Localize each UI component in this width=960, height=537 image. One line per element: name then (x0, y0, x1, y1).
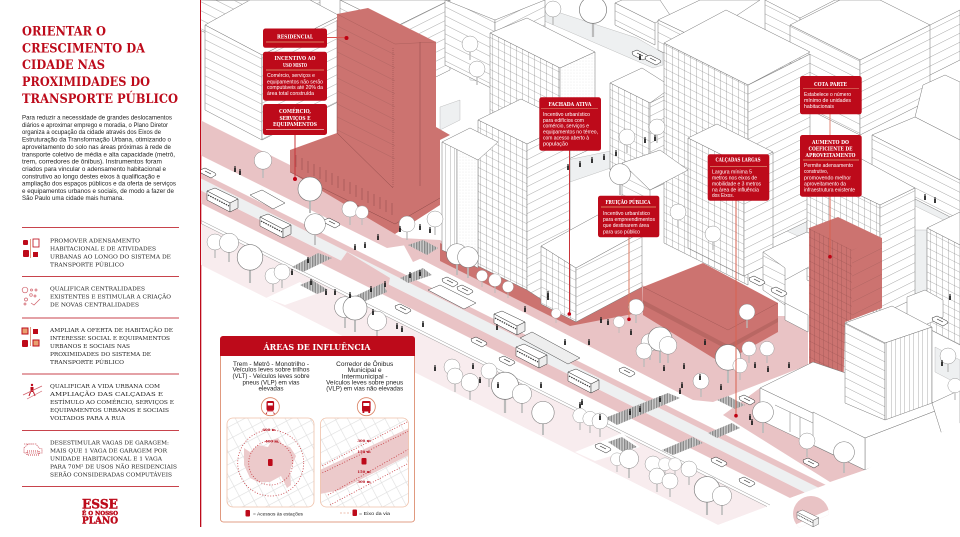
callout: aumento do coeficiente de aproveitamento: promovendo melhor (804, 175, 851, 181)
legend: stations (246, 510, 304, 516)
column text: bus: Municipal e (348, 367, 382, 374)
callout: fruição pública: para uso público (603, 229, 640, 235)
intro text: São Paulo uma cidade mais humana. (22, 195, 124, 202)
callout: fachada ativa: FACHADA ATIVA (548, 102, 592, 108)
objective 5 (24, 441, 177, 479)
objective 5: SERÃO CONSIDERADAS COMPUTÁVEIS (50, 471, 172, 479)
objective 3: TRANSPORTE PÚBLICO (50, 358, 124, 366)
front right building and podium (760, 306, 960, 470)
callout: fachada ativa: Incentivo urbanístico (543, 112, 590, 118)
intro text (22, 114, 176, 202)
objective 3: PROXIMIDADES DO SISTEMA DE (50, 352, 151, 358)
callout: incentivo ao uso misto: INCENTIVO AO (274, 56, 316, 62)
column text: bus: Veículos leves sobre pneus (326, 379, 403, 386)
column text: rail: pneus (VLP) em vias (242, 379, 300, 386)
callout: incentivo ao uso misto: USO MISTO (283, 63, 307, 69)
objective 1: URBANAS AO LONGO DO SISTEMA DE (50, 255, 171, 261)
title (22, 25, 178, 107)
intro text: criados para vincular o adensamento habitacional e (22, 166, 166, 173)
objective 4: ESTÍMULO AO COMÉRCIO, SERVIÇOS E (50, 398, 174, 406)
callout: cota parte: habitacionais (804, 104, 834, 110)
intro text: Para reduzir a necessidade de grandes deslocamentos (22, 114, 172, 122)
trees (207, 0, 960, 515)
objective 4: QUALIFICAR A VIDA URBANA COM (50, 384, 160, 390)
callout: incentivo ao uso misto (263, 52, 327, 101)
callout: incentivo ao uso misto: computáveis até 20% da (267, 85, 324, 91)
objective 1 (23, 239, 171, 269)
title: TRANSPORTE PÚBLICO (22, 90, 178, 107)
callout: aumento do coeficiente de aproveitamento: AUMENTO DO (811, 140, 849, 146)
title: CIDADE NAS (22, 58, 105, 73)
callout: aumento do coeficiente de aproveitamento: aproveitamento da (804, 181, 847, 187)
vehicles (200, 50, 948, 487)
callout: cota parte: Estabelece o número (804, 92, 851, 98)
icon: bus (357, 398, 375, 416)
callout: aumento do coeficiente de aproveitamento (800, 135, 862, 197)
callout: comércio, serviços e equipamentos: COMÉRCIO, (279, 107, 311, 115)
column text: rail (232, 361, 310, 392)
column text: rail: Veículos leves sobre trilhos (232, 366, 310, 374)
intro text: construtivo ao longo destes eixos à qualificação e (22, 173, 160, 180)
map: bus corridor influence: 150 m (357, 449, 371, 454)
callout: calçadas largas (708, 154, 769, 201)
callout: fachada ativa: equipamentos no térreo, (543, 130, 598, 136)
lens detail: bus (793, 496, 829, 528)
objective 1: TRANSPORTE PÚBLICO (50, 261, 124, 269)
callout: calçadas largas: Largura mínima 5 (712, 170, 752, 176)
intro text: diários e aproximar emprego e moradia, o Plano Diretor (22, 122, 168, 129)
objective 4: AMPLIAÇÃO DAS CALÇADAS E (49, 390, 163, 398)
callout: cota parte (800, 76, 862, 114)
vertical red divider (200, 0, 201, 527)
callout: fruição pública: que destinarem área (603, 223, 650, 229)
callout: aumento do coeficiente de aproveitamento: COEFICIENTE DE (808, 146, 852, 152)
intro text: ampliação dos espaços públicos e da oferta de serviços (22, 181, 176, 188)
legend: corridor axis: = Eixo da via (359, 511, 391, 516)
column text: bus: Corredor de Ônibus (336, 361, 393, 368)
callout: calçadas largas: mobilidade e 3 metros (712, 182, 761, 188)
objective 5: UNIDADE HABITACIONAL E 1 VAGA (50, 457, 163, 463)
callout: fachada ativa: para edifícios com (543, 118, 584, 124)
column text: rail: (VLT) - Veículos leves sobre (232, 373, 310, 380)
legend: corridor axis (340, 510, 391, 516)
objective 2 (22, 287, 171, 309)
callout: fruição pública: para empreendimentos (603, 217, 655, 223)
buildings: middle row (490, 10, 960, 345)
callout: fachada ativa (539, 97, 601, 151)
objective 2: EXISTENTES E ESTIMULAR A CRIAÇÃO (50, 293, 171, 301)
intro text: trem, corredores de ônibus). Instrumentos foram (22, 159, 162, 166)
callout: incentivo ao uso misto: área total construída (267, 91, 315, 97)
icon: train (261, 398, 279, 416)
tall red building, residential tower (290, 8, 450, 234)
callout: fruição pública: FRUIÇÃO PÚBLICA (606, 198, 651, 206)
map: bus corridor influence: 150 m (357, 469, 371, 474)
ground: avenue strips (200, 120, 865, 525)
red plaza building (643, 263, 778, 367)
callout: cota parte: mínimo de unidades (804, 98, 851, 104)
callout: fachada ativa: comércio, serviços e (543, 124, 589, 130)
callout: incentivo ao uso misto: Comércio, serviços e (267, 73, 315, 79)
objective 1: HABITACIONAL E DE ATIVIDADES (50, 247, 156, 253)
logo: ESSE (82, 498, 118, 512)
objective 2: DE NOVAS CENTRALIDADES (50, 303, 139, 309)
buildings: back row (200, 0, 960, 222)
map: bus corridor influence (320, 418, 409, 507)
column text: rail: Trem - Metrô - Monotrilho - (233, 361, 309, 368)
map: bus corridor influence: 300 m (357, 479, 371, 484)
callout: fruição pública (598, 196, 659, 237)
callout: fachada ativa: com acesso aberto à (543, 136, 590, 142)
intro text: Estruturação da Transformação Urbana, otimizando o (22, 137, 171, 144)
city illustration (200, 0, 960, 525)
column text: bus: Intermunicipal - (342, 373, 388, 380)
objective 2: QUALIFICAR CENTRALIDADES (50, 287, 145, 293)
tall red building, right tower (809, 217, 882, 372)
column text: rail: elevadas (258, 385, 284, 392)
map: station influence (227, 418, 314, 507)
objectives list (22, 228, 179, 486)
objective 4: VOLTADOS PARA A RUA (49, 416, 126, 422)
panel heading: ÁREAS DE INFLUÊNCIA (263, 341, 371, 353)
callout: calçadas largas: dos Eixos. (712, 193, 734, 199)
callout: comércio, serviços e equipamentos: SERVIÇOS E (280, 116, 310, 122)
crosswalks (292, 240, 745, 455)
callout: calçadas largas: CALÇADAS LARGAS (716, 158, 760, 164)
logo: PLANO (82, 516, 118, 526)
callout: fruição pública: Incentivo urbanístico (603, 211, 650, 217)
objective 4 (23, 384, 174, 422)
callout: incentivo ao uso misto: equipamentos não serão (267, 80, 323, 86)
callout: aumento do coeficiente de aproveitamento: infraestrutura existente (804, 187, 855, 193)
callout: comércio, serviços e equipamentos: EQUIPAMENTOS (273, 122, 317, 128)
logo: É O NOSSO (82, 509, 118, 517)
panel: áreas de influência (220, 336, 415, 522)
leader lines and anchor dots (293, 36, 832, 418)
title: PROXIMIDADES DO (22, 75, 150, 90)
objective 3: URBANOS E SOCIAIS NAS (50, 344, 130, 350)
callout: aumento do coeficiente de aproveitamento: construtivo, (804, 169, 828, 175)
intro text: organiza a ocupação da cidade através dos Eixos de (22, 129, 161, 136)
objective 5: MAIS QUE 1 VAGA DE GARAGEM POR (50, 449, 168, 455)
callout: fachada ativa: população (543, 141, 568, 147)
logo (82, 498, 118, 526)
callout: comércio, serviços e equipamentos (263, 104, 327, 135)
objective 3: INTERESSE SOCIAL E EQUIPAMENTOS (50, 336, 170, 342)
objective 5: DESESTIMULAR VAGAS DE GARAGEM: (50, 441, 169, 447)
legend: stations: = Acessos às estações (253, 511, 304, 516)
map: station influence: 600 m (262, 427, 276, 432)
pedestrians (234, 54, 951, 425)
callout: calçadas largas: na área de influência (712, 188, 760, 194)
title: CRESCIMENTO DA (22, 41, 146, 56)
callout: residencial: RESIDENCIAL (277, 34, 313, 40)
map: bus corridor influence: 300 m (357, 438, 371, 443)
panel heading (220, 336, 415, 356)
objective 1: PROMOVER ADENSAMENTO (50, 239, 140, 245)
callout: residencial (263, 28, 327, 48)
objective 5: PARA 70M² DE USOS NÃO RESIDENCIAIS (50, 463, 177, 471)
objective 4: EQUIPAMENTOS URBANOS E SOCIAIS (50, 408, 169, 414)
callout: aumento do coeficiente de aproveitamento: APROVEITAMENTO (805, 153, 856, 159)
buildings: plaza front row (440, 99, 643, 326)
side streets (440, 7, 960, 385)
intro text: e equipamentos urbanos e sociais, de modo a fazer de (22, 188, 174, 195)
intro text: transporte coletivo de média e alta capacidade (metrô, (22, 151, 175, 158)
callout: cota parte: COTA PARTE (814, 82, 847, 88)
callout: calçadas largas: metros nos eixos de (712, 176, 757, 182)
map: station influence: 400 m (265, 438, 278, 444)
intro text: aproveitamento do solo nas áreas próximas à rede de (22, 144, 171, 151)
column text: bus (326, 361, 403, 392)
objective 3 (22, 326, 173, 366)
column text: bus: (VLP) em vias não elevadas (326, 385, 403, 392)
callout: aumento do coeficiente de aproveitamento: Permite adensamento (804, 163, 853, 169)
objective 3: AMPLIAR A OFERTA DE HABITAÇÃO DE (49, 326, 173, 334)
title: ORIENTAR O (22, 25, 106, 40)
